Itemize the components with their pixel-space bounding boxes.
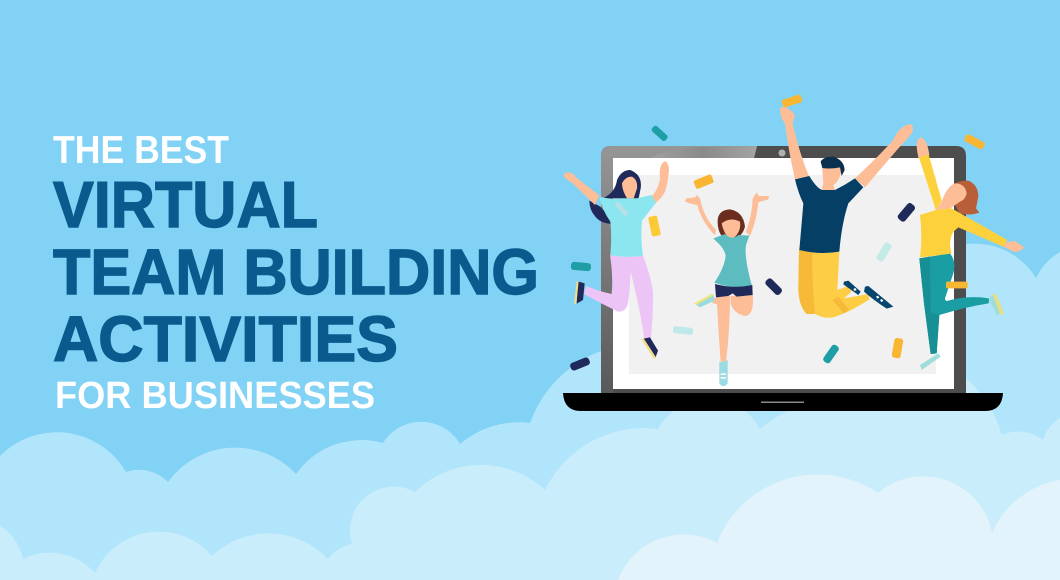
heading line: activities: ACTIVITIES — [53, 303, 398, 375]
pants shade — [798, 249, 815, 314]
raised arm — [919, 155, 942, 211]
confetti: yellow on screen — [648, 215, 661, 237]
pants shade — [919, 257, 939, 354]
trackpad notch — [761, 402, 804, 403]
heading line: team building: TEAM BUILDING — [53, 236, 539, 308]
confetti: orange bottom — [891, 337, 904, 359]
right arm — [855, 124, 913, 187]
face — [722, 220, 740, 240]
orange confetti on leg — [946, 282, 968, 288]
title text — [53, 129, 539, 417]
shoe left — [577, 281, 585, 304]
shoe sole right — [641, 338, 656, 359]
confetti — [569, 94, 986, 371]
face — [622, 177, 637, 198]
person: girl in teal dress — [685, 192, 769, 386]
confetti: navy right — [897, 202, 916, 223]
front cloud layer — [618, 474, 1060, 580]
bent leg — [731, 294, 753, 316]
shirt — [599, 195, 656, 257]
standing leg — [717, 296, 730, 362]
shoe standing — [719, 360, 728, 386]
white screen — [613, 158, 954, 389]
shoe lower — [920, 353, 941, 370]
person: woman in yellow shirt — [917, 137, 1024, 370]
shoe raised sole — [993, 294, 1004, 315]
pants — [584, 255, 653, 340]
shoe stripes — [721, 373, 726, 379]
confetti: teal top left — [651, 125, 669, 142]
heading line: the best: THE BEST — [53, 129, 229, 172]
dress — [713, 234, 752, 287]
shirt — [795, 176, 863, 253]
shirt confetti — [614, 201, 629, 217]
left arm — [564, 172, 599, 205]
camera — [778, 150, 786, 156]
frame gloss — [601, 146, 757, 394]
raised hand — [917, 137, 929, 158]
pants — [919, 253, 989, 354]
hair — [821, 157, 845, 176]
screen inner panel — [629, 175, 936, 374]
shoe back — [843, 281, 861, 295]
confetti: navy center — [764, 277, 783, 296]
confetti: navy lower left — [569, 357, 591, 371]
pants — [798, 249, 869, 318]
shoe right — [644, 337, 658, 358]
hair — [950, 181, 979, 215]
confetti: orange top hand — [781, 94, 803, 108]
shoe raised sole — [694, 294, 713, 305]
shoe sole left — [574, 281, 579, 304]
laptop base — [563, 393, 1003, 411]
left arm — [780, 107, 809, 179]
confetti: orange on screen — [693, 174, 714, 189]
right arm — [651, 161, 669, 203]
face — [936, 183, 967, 210]
person: man in navy shirt — [780, 107, 913, 318]
shoe front — [864, 286, 893, 309]
confetti: pale right — [875, 241, 893, 263]
heading line: virtual: VIRTUAL — [53, 168, 318, 241]
left arm — [685, 195, 716, 235]
hair — [589, 170, 641, 224]
middle cloud layer — [0, 345, 1060, 580]
laptop frame — [601, 146, 966, 394]
outstretched hand — [1002, 241, 1024, 252]
confetti: teal bottom — [822, 344, 840, 364]
heading line: for businesses: FOR BUSINESSES — [55, 375, 375, 417]
frame top highlight — [650, 146, 757, 158]
confetti: pale center — [673, 326, 693, 335]
back cloud layer — [0, 240, 1060, 580]
hair — [718, 209, 745, 237]
confetti: teal left — [571, 262, 591, 271]
shoe laces — [853, 288, 883, 302]
shorts — [715, 284, 753, 297]
shoe raised — [695, 294, 715, 307]
knee shade — [832, 297, 849, 313]
confetti: orange top right — [963, 133, 986, 150]
back foot — [712, 297, 718, 304]
shoe raised — [988, 295, 1000, 315]
right arm — [746, 192, 769, 236]
person: woman in blue shirt — [564, 161, 669, 359]
shirt — [920, 208, 1007, 257]
face and neck — [822, 162, 843, 191]
laptop — [563, 146, 1003, 411]
